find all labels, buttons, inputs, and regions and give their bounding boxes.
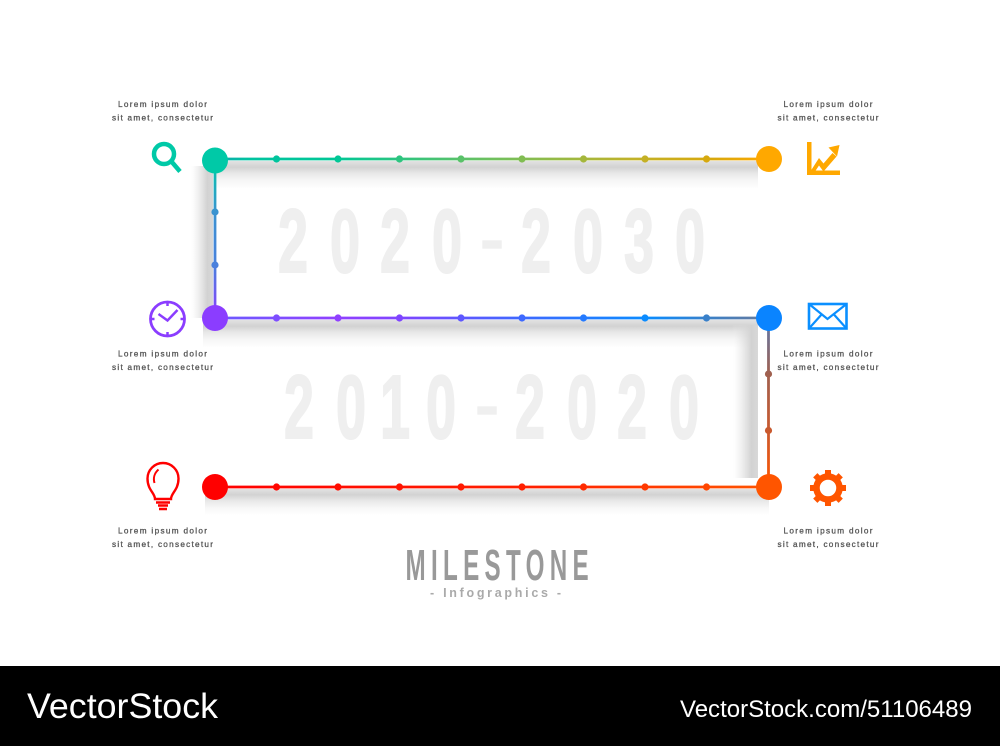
footer url: VectorStock.com/51106489: [680, 696, 972, 723]
title: MILESTONE: MILESTONE: [406, 540, 589, 590]
year label: 2020-2030: 2030: [521, 191, 705, 291]
caption: top right: Lorem ipsum dolor: [784, 100, 873, 109]
caption: bottom right: sit amet, consectetur: [778, 540, 879, 549]
icon: gear: [810, 470, 846, 506]
subtitle: Infographics: - Infographics -: [430, 586, 561, 600]
path shadows: [190, 161, 769, 515]
caption: bottom right: Lorem ipsum dolor: [784, 526, 873, 536]
caption: bottom right: [778, 526, 879, 549]
node: orange: [756, 474, 782, 500]
year label: 2020-2030: -: [480, 207, 504, 272]
caption: middle left: sit amet, consectetur: [112, 363, 213, 372]
caption: bottom left: [112, 526, 213, 549]
year label: 2020-2030: 2020: [278, 191, 462, 291]
timeline segment: left connector: [211, 160, 219, 318]
icon: light bulb: [148, 463, 178, 509]
caption: top left: Lorem ipsum dolor: [118, 100, 207, 109]
timeline segment: right connector: [765, 318, 772, 487]
icon: clock: [150, 302, 184, 336]
year label: 2010-2020: [284, 357, 699, 457]
node: amber: [756, 146, 782, 172]
timeline segment: bottom: [215, 483, 769, 491]
year label: 2020-2030: [278, 191, 705, 291]
node: purple: [202, 305, 228, 331]
caption: middle right: [778, 350, 879, 372]
timeline segment: top: [215, 155, 769, 163]
caption: middle left: Lorem ipsum dolor: [118, 350, 207, 358]
icon: growth chart: [807, 142, 840, 175]
caption: top right: sit amet, consectetur: [778, 114, 879, 122]
node: teal: [202, 148, 228, 174]
caption: top right: [778, 100, 879, 122]
icon: magnifying glass: [154, 144, 180, 172]
caption: middle left: [112, 350, 213, 372]
caption: top left: [112, 100, 213, 122]
year label: 2010-2020: -: [475, 373, 499, 438]
node: red: [202, 474, 228, 500]
year label: 2010-2020: 2020: [515, 357, 699, 457]
footer brand: VectorStock: [27, 687, 219, 726]
node: blue: [756, 305, 782, 331]
caption: middle right: sit amet, consectetur: [778, 363, 879, 372]
timeline segment: middle: [215, 314, 769, 322]
icon: envelope: [809, 304, 846, 328]
year label: 2010-2020: 2010: [284, 357, 456, 457]
caption: bottom left: sit amet, consectetur: [112, 540, 213, 549]
footer bar: [0, 666, 1000, 746]
caption: top left: sit amet, consectetur: [112, 114, 213, 122]
caption: middle right: Lorem ipsum dolor: [784, 350, 873, 358]
caption: bottom left: Lorem ipsum dolor: [118, 526, 207, 536]
